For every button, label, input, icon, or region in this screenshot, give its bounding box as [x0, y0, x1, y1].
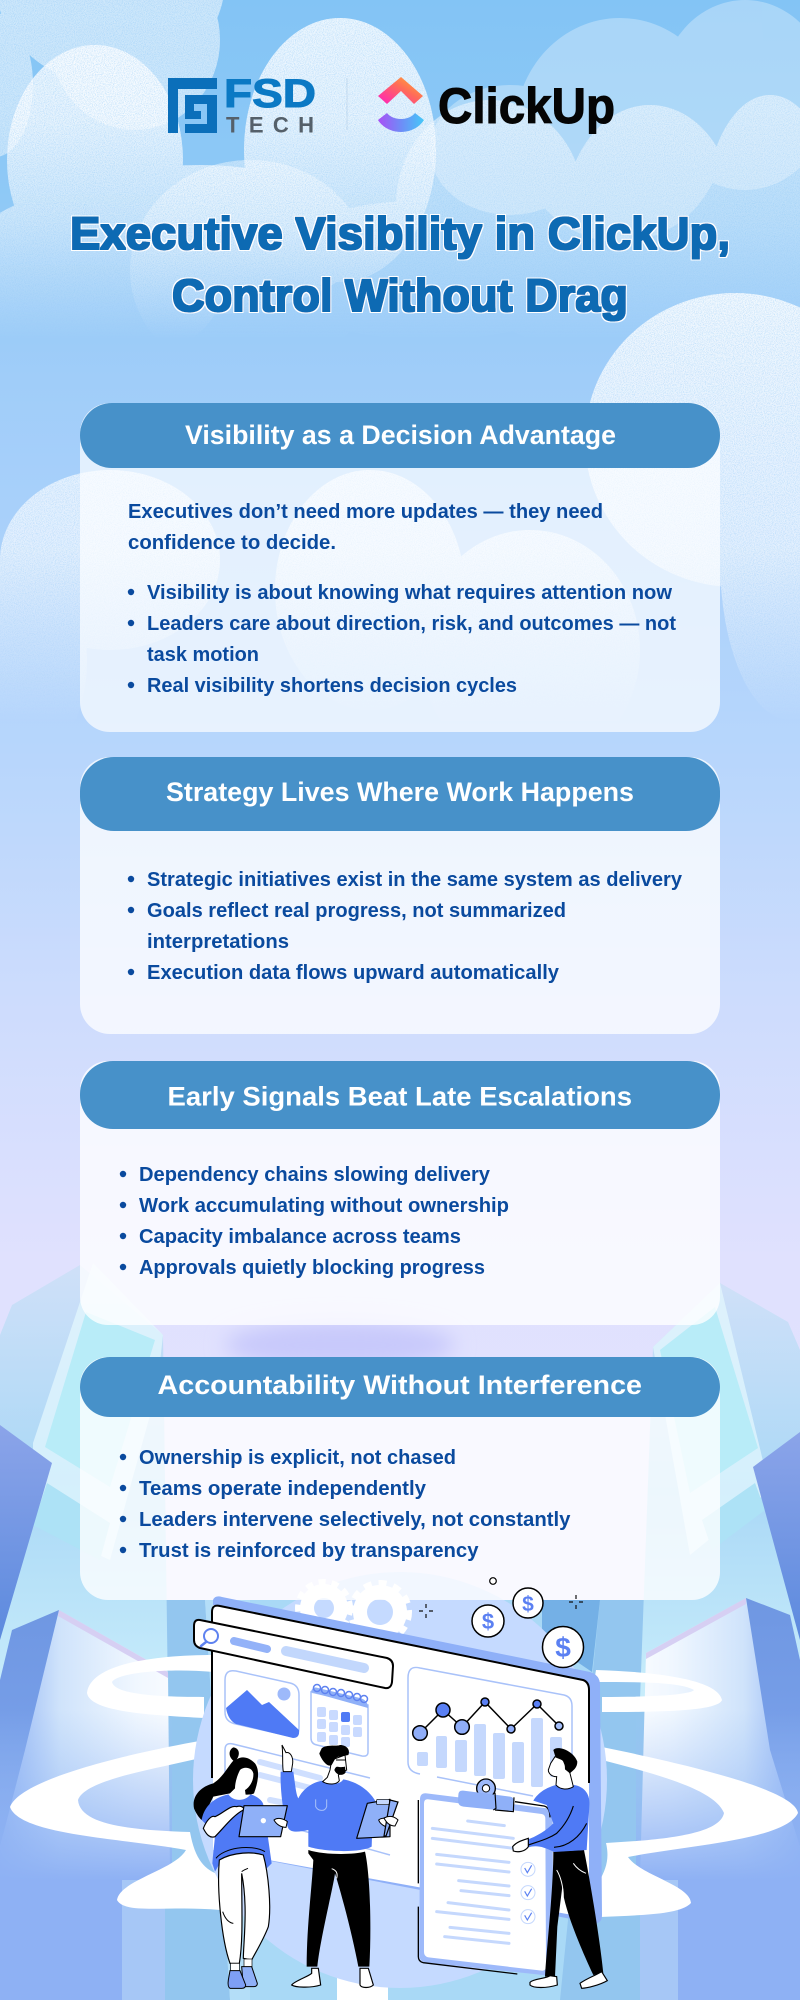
bullet list: Execution data flows upward automatically	[147, 962, 560, 984]
panel: visibility as a decision advantage	[80, 403, 720, 732]
clipboard checklist	[418, 1779, 553, 1976]
heading bar: Strategy Lives Where Work Happens	[166, 777, 634, 807]
wordmark FSD: FSD	[224, 72, 316, 116]
title: Executive Visibility in ClickUp,	[70, 208, 730, 259]
bullet list: Teams operate independently	[139, 1478, 427, 1500]
bullet list: Work accumulating without ownership	[139, 1195, 509, 1217]
bullet list: Leaders care about direction, risk, and outcomes — not	[147, 613, 676, 635]
bullet list: Ownership is explicit, not chased	[139, 1447, 456, 1469]
logo: ClickUp	[378, 77, 615, 134]
dashboard board	[212, 1596, 602, 1923]
person: woman with tablet	[194, 1747, 287, 1988]
backdrop circle behind illustration	[193, 1572, 607, 1988]
bullet list: Capacity imbalance across teams	[139, 1226, 461, 1248]
heading bar	[80, 757, 720, 831]
chart tile	[408, 1667, 572, 1796]
bar chart	[417, 1718, 562, 1787]
icon: gears	[298, 1582, 409, 1641]
bullet list: interpretations	[147, 931, 289, 953]
icon: FSD mark	[168, 78, 217, 133]
line chart	[413, 1698, 563, 1740]
bullet list: Leaders intervene selectively, not constantly	[139, 1509, 571, 1531]
intro text: Executives don’t need more updates — they need	[128, 501, 603, 523]
bullet list: Dependency chains slowing delivery	[139, 1164, 491, 1186]
icon: dollar coins	[472, 1578, 584, 1668]
icon: ClickUp mark	[378, 77, 424, 132]
bullet list: task motion	[147, 644, 259, 666]
logo divider	[346, 78, 348, 130]
intro text	[128, 501, 603, 554]
heading bar: Accountability Without Interference	[158, 1370, 642, 1400]
bullet list	[128, 869, 683, 984]
wordmark ClickUp: ClickUp	[438, 78, 615, 134]
bullet list: Approvals quietly blocking progress	[139, 1257, 485, 1279]
panel: accountability without interference	[80, 1357, 720, 1600]
bullet list: Real visibility shortens decision cycles	[147, 675, 517, 697]
lower text tile	[225, 1744, 390, 1855]
bullet list	[128, 582, 676, 697]
bullet list: Trust is reinforced by transparency	[139, 1540, 479, 1562]
background: grainy middle clouds	[0, 293, 800, 694]
bullet list: Visibility is about knowing what requires attention now	[147, 582, 672, 604]
person: man pointing	[281, 1745, 390, 1987]
heading bar	[80, 403, 720, 468]
background: grainy foreground cloud layer	[0, 18, 436, 320]
title: Control Without Drag	[172, 270, 628, 321]
background: white swoosh ribbons	[10, 1655, 798, 1917]
bullet list: Goals reflect real progress, not summarized	[147, 900, 566, 922]
background: city buildings	[0, 1263, 800, 2000]
heading bar	[80, 1357, 720, 1417]
panel: early signals beat late escalations	[80, 1061, 720, 1325]
heading bar: Visibility as a Decision Advantage	[185, 420, 616, 450]
icon: dollar coins: $	[482, 1609, 494, 1634]
icon: dollar coins: $	[555, 1632, 571, 1663]
intro text: confidence to decide.	[128, 532, 336, 554]
search bar	[194, 1620, 393, 1688]
panel: strategy lives where work happens	[80, 757, 720, 1034]
icon: sparkles	[419, 1595, 583, 1618]
image tile	[225, 1671, 299, 1738]
wordmark TECH: TECH	[226, 112, 314, 138]
heading bar: Early Signals Beat Late Escalations	[168, 1082, 632, 1112]
bullet list	[120, 1164, 509, 1279]
icon: dollar coins: $	[522, 1593, 534, 1616]
bullet list	[120, 1447, 571, 1562]
background: grainy back cloud layer	[0, 0, 800, 314]
title	[70, 208, 730, 321]
illustration: dashboard team	[194, 1578, 607, 1988]
background: soft back clouds	[430, 0, 800, 242]
clipboard held by pointing man, right portion	[384, 1800, 398, 1836]
person: man with clipboard	[513, 1748, 607, 1988]
logo: FSD Tech	[168, 72, 316, 138]
heading bar	[80, 1061, 720, 1129]
bullet list: Strategic initiatives exist in the same system as delivery	[147, 869, 683, 891]
calendar tile	[311, 1684, 368, 1756]
